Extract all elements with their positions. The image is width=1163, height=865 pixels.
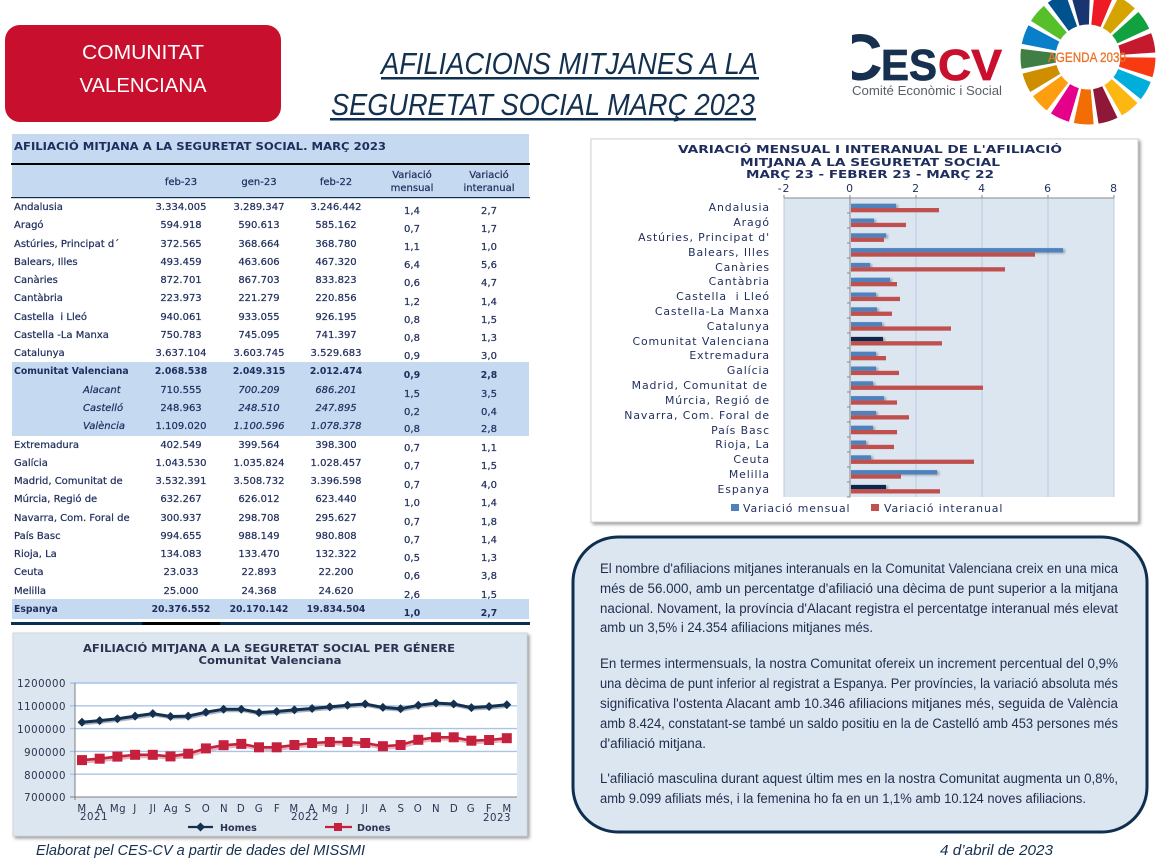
row: Madrid [14,476,497,491]
row: Astúries: 1,0 [481,242,497,253]
x axis labels: N [432,804,440,815]
row: Extremadura: 398.300 [315,440,357,451]
row: Espanya: 1,0 [404,608,421,619]
row: Comunitat Valenciana: 2.068.538 [155,366,207,377]
row: Espanya: 20.170.142 [230,604,288,615]
category labels: Astúries, Principat d' [638,231,770,244]
x axis labels: 2022 [291,812,319,823]
row: València: 1.109.020 [156,421,206,432]
row: Canàries: Canàries [14,274,58,286]
row: Canàries: 867.703 [238,275,280,286]
paragraph 3 [600,771,1118,806]
category labels: Múrcia, Regió de [665,394,770,407]
row: Navarra: 298.708 [238,513,280,524]
row: Comunitat Valenciana: 2,8 [481,370,497,381]
axis values: 6 [1044,182,1052,195]
chart title [678,143,1062,181]
row: Castella-La Manxa: 741.397 [315,330,357,341]
category labels: Andalusia [709,201,770,214]
legend: Variació mensual [743,502,850,515]
logo: CES-CV: ES [881,41,937,90]
category labels: Rioja, La [715,438,770,451]
axis values: 2 [912,182,920,195]
row: Canàries [14,274,497,289]
row: Catalunya: 3.603.745 [234,348,284,359]
row: Melilla: 1,5 [481,590,497,601]
row: Castella i Lleó: 926.195 [315,312,357,323]
x axis labels [77,804,512,824]
panel: bar chart variació mensual i interanual [591,139,1138,522]
y axis labels: 1200000 [17,679,66,690]
row: País Basc: 988.149 [238,531,280,542]
row: Cantàbria: 1,4 [481,297,497,308]
row: Castella-La Manxa: 750.783 [160,330,202,341]
row: Navarra: 1,8 [481,517,497,528]
row: Rioja: 133.470 [238,549,280,560]
x axis labels: A [96,804,104,815]
row: Extremadura [14,440,497,454]
row: Galícia: 1.043.530 [156,458,206,469]
panel: line chart per gènere [13,633,527,836]
paragraph 1: amb un 3,5% i 24.354 afiliacions mitjanes més. [600,620,873,635]
category labels: Catalunya [707,320,770,333]
axis values: 8 [1110,182,1118,195]
row: Andalusia: 2,7 [481,206,497,217]
row: Ceuta: 23.033 [164,567,198,578]
row: Melilla: 2,6 [404,590,420,601]
row: Extremadura: 1,1 [481,443,497,454]
row: Rioja: 134.083 [160,549,202,560]
axis values [778,182,1118,195]
axis values: 0 [846,182,854,195]
row: Canàries: 0,6 [404,278,420,289]
category labels: Galícia [727,364,770,377]
x axis labels: J [345,804,350,815]
x axis labels: O [414,804,422,815]
row: Comunitat Valenciana [14,366,497,381]
row: Canàries: 4,7 [481,278,497,289]
row: Catalunya [14,348,497,362]
category labels: Melilla [729,468,770,481]
row: Astúries: 368.664 [238,239,280,250]
row: València: València [83,420,125,432]
row: Aragó: 594.918 [160,220,202,231]
row: Catalunya: Catalunya [14,348,65,359]
row: Castella i Lleó: Castella i Lleó [14,311,87,323]
row: Aragó: 585.162 [315,220,357,231]
row: Castella-La Manxa [14,330,497,344]
row: Espanya: 2,7 [481,608,497,619]
row: València: 2,8 [481,424,497,435]
chart title: VARIACIÓ MENSUAL I INTERANUAL DE L'AFILIACIÓ [678,143,1062,156]
row: País Basc: 980.808 [315,531,357,542]
row: Castelló [83,402,497,418]
row: Castella i Lleó: 933.055 [238,312,280,323]
table header: feb-22 [320,177,352,188]
row: Alacant: Alacant [82,385,122,396]
category labels: País Basc [711,424,770,437]
row: Espanya: Espanya [14,604,58,615]
table header: interanual [463,183,515,194]
table title: AFILIACIÓ MITJANA A LA SEGURETAT SOCIAL. MARÇ 2023 [14,140,386,153]
paragraph 1: més de 56.000, amb un percentatge d'afiliació una dècima de punt superior a la mitjana [600,581,1119,596]
row: Catalunya: 3,0 [481,351,497,362]
x axis labels: N [220,804,228,815]
icon: Agenda 2030 wheel [1017,0,1159,128]
footer: date: 4 d’abril de 2023 [940,842,1054,859]
row: Castella-La Manxa: 0,8 [404,333,420,344]
row: Cantàbria [14,292,497,308]
category labels: Ceuta [733,453,770,466]
footer: source: Elaborat pel CES-CV a partir de dades del MISSMI [36,842,365,859]
x axis labels: Jl [149,804,156,815]
row: Rioja [14,549,497,564]
row: Madrid: 3.532.391 [156,476,206,487]
row: Astúries [14,238,497,253]
category labels [624,201,770,496]
row: Andalusia [14,202,497,217]
category labels: Espanya [718,483,770,496]
x axis labels: D [450,804,458,815]
row: Aragó: Aragó [14,219,44,231]
paragraph 1: nacional. Novament, la província d'Alacant registra el percentatge interanual més elevat [600,601,1118,616]
icon: Agenda 2030 wheel: AGENDA 2030 [1048,50,1126,65]
table: afiliació mitjana [11,134,530,625]
logo: CES-CV: Comité Econòmic i Social [852,84,1002,98]
line: Homes [82,703,508,724]
x axis labels: A [379,804,387,815]
row: Espanya: 19.834.504 [307,604,366,615]
paragraph 1: El nombre d'afiliacions mitjanes interanuals en la Comunitat Valenciana creix en una mica [600,561,1119,576]
row: Catalunya: 3.529.683 [311,348,361,359]
paragraph 3: L'afiliació masculina durant aquest últim mes en la nostra Comunitat augmenta un 0,8%, [600,771,1118,786]
row: Rioja: Rioja, La [14,549,57,560]
row: Cantàbria: 221.279 [238,293,280,304]
category labels: Balears, Illes [688,246,770,259]
row: Galícia: Galícia [14,457,48,469]
legend: Dones [357,823,391,834]
row: Galícia: 0,7 [404,461,420,472]
row: València: 1.078.378 [311,421,361,432]
row: Castella-La Manxa: Castella -La Manxa [14,330,109,341]
row: Alacant: 710.555 [160,385,202,396]
row: Catalunya: 3.637.104 [156,348,206,359]
title [330,46,759,122]
row: Múrcia [14,493,497,509]
row: Madrid: Madrid, Comunitat de [14,476,123,487]
logo: CES-CV [852,34,1002,95]
row: Rioja: 1,3 [481,553,497,564]
y axis labels: 900000 [24,748,66,759]
category labels: Canàries [715,261,770,274]
row: Castella i Lleó: 1,5 [481,315,497,326]
row: Múrcia: 1,4 [481,498,497,509]
row: Balears: 463.606 [238,257,280,268]
row: País Basc: 994.655 [160,531,202,542]
row: Madrid: 3.396.598 [311,476,361,487]
chart title: MITJANA A LA SEGURETAT SOCIAL [740,156,1000,169]
row: País Basc: País Basc [14,530,61,542]
paragraph 2: significativa l'ostenta Alacant amb 10.346 afiliacions mitjanes més, seguida de València [600,696,1119,711]
row: Galícia: 1.028.457 [311,458,361,469]
row: Navarra: 295.627 [315,513,357,524]
row: Aragó: 0,7 [404,224,420,235]
row: Navarra [14,513,497,528]
bars: variació interanual [851,208,1035,494]
row: Astúries: 368.780 [315,239,357,250]
row: Melilla: 24.620 [318,586,354,597]
table header: mensual [391,183,433,194]
title: AFILIACIONS MITJANES A LA [379,46,758,81]
y axis labels: 1100000 [17,702,66,713]
category labels: Extremadura [689,349,770,362]
row: País Basc [14,530,497,546]
paragraph 2: una dècima de punt inferior al registrat a Espanya. Per províncies, la variació absoluta més [600,676,1118,691]
row: Melilla: 25.000 [164,586,198,597]
row: Múrcia: 1,0 [404,498,420,509]
legend: Variació interanual [884,502,1003,515]
row: Cantàbria: 223.973 [160,293,202,304]
x axis labels: Ag [164,804,178,815]
row: Astúries: Astúries, Principat d´ [14,238,119,250]
paragraph 2: amb 8.424, constatant-se també un saldo positiu en la de Castelló amb 453 persones més [600,716,1118,731]
x axis labels: D [237,804,245,815]
row: Canàries: 833.823 [315,275,357,286]
row: Espanya [14,604,497,619]
row: Rioja: 132.322 [315,549,357,560]
row: Ceuta: Ceuta [14,567,44,578]
row: Balears: 467.320 [315,257,357,268]
table header [165,169,515,194]
row: Aragó: 590.613 [238,220,280,231]
row: Castelló: 248.510 [238,403,280,414]
row: Ceuta: 22.200 [318,567,354,578]
x axis labels: 2023 [483,813,511,824]
x axis labels: O [202,804,210,815]
table header: Variació [469,169,509,181]
row: Comunitat Valenciana: 2.049.315 [233,366,285,377]
row: Balears: 6,4 [404,260,420,271]
line: Dones [82,737,508,762]
chart title [83,642,455,667]
x axis labels: G [467,804,475,815]
paragraph 2: En termes intermensuals, la nostra Comunitat ofereix un increment percentual del 0,9% [600,656,1118,671]
badge: Comunitat Valenciana [5,25,281,122]
table header: feb-23 [165,177,197,188]
y axis labels: 700000 [24,793,66,804]
bars: variació mensual [851,204,1063,489]
x axis labels: M [77,804,87,815]
row: Alacant: 1,5 [404,389,420,400]
row: País Basc: 1,4 [481,535,497,546]
row: Extremadura: 402.549 [160,440,202,451]
row: Andalusia: Andalusia [14,202,63,213]
table header: Variació [392,169,432,181]
row: Comunitat Valenciana: 2.012.474 [310,366,363,377]
row: Ceuta: 22.893 [242,567,276,578]
paragraph 3: amb 9.099 afiliats més, i la femenina ho fa en un 1,1% amb 10.124 noves afiliacions. [600,791,1086,806]
legend [188,822,391,834]
row: Madrid: 4,0 [481,480,497,491]
row: Canàries: 872.701 [160,275,202,286]
y axis labels: 1000000 [17,725,66,736]
y axis labels [17,679,66,804]
row: Castella i Lleó: 940.061 [160,312,202,323]
x axis labels: A [308,804,316,815]
x axis labels: M [289,804,299,815]
plot area [784,198,1114,497]
plot area [75,683,517,797]
logo: CES-CV: CV [938,41,1003,90]
row: Extremadura: 399.564 [238,440,280,451]
x axis labels: G [255,804,263,815]
row: País Basc: 0,7 [404,535,420,546]
row: Ceuta: 3,8 [481,571,497,582]
row: Galícia: 1,5 [481,461,497,472]
row: Alacant: 686.201 [315,385,357,396]
row: Múrcia: 626.012 [238,494,280,505]
chart title: AFILIACIÓ MITJANA A LA SEGURETAT SOCIAL PER GÉNERE [83,642,455,655]
x axis labels: Mg [322,804,338,815]
x axis labels: F [486,804,492,815]
legend: Homes [220,823,257,834]
category labels: Aragó [733,216,770,229]
y axis labels: 800000 [24,771,66,782]
row: Madrid: 3.508.732 [234,476,284,487]
row: Galícia [14,457,497,472]
row: Cantàbria: 1,2 [404,297,420,308]
row: Andalusia: 3.246.442 [311,202,361,213]
x axis labels: M [502,804,512,815]
row: Castelló: 0,4 [481,407,497,418]
table header: gen-23 [241,177,277,188]
chart title: Comunitat Valenciana [198,655,342,667]
x axis labels: Jl [361,804,368,815]
row: Múrcia: 632.267 [160,494,202,505]
badge: Comunitat Valenciana: COMUNITAT [82,41,204,64]
row: Extremadura: 0,7 [404,443,420,454]
category labels: Comunitat Valenciana [632,335,770,348]
row: Navarra: 300.937 [160,513,202,524]
x axis labels: S [398,804,404,815]
row: Aragó [14,219,497,235]
row: Balears [14,257,497,271]
row: Andalusia: 3.334.005 [156,202,206,213]
row: Espanya: 20.376.552 [152,604,210,615]
row: València: 1.100.596 [234,421,284,432]
chart title: MARÇ 23 - FEBRER 23 - MARÇ 22 [746,168,994,181]
category labels: Cantàbria [709,275,770,288]
x axis labels: J [132,804,137,815]
row: Cantàbria: 220.856 [315,293,357,304]
row: Rioja: 0,5 [404,553,420,564]
row: Comunitat Valenciana: Comunitat Valenciana [14,366,129,377]
row: Astúries: 1,1 [404,242,420,253]
row: València: 0,8 [404,424,420,435]
row: Melilla: 24.368 [242,586,276,597]
x axis labels: S [185,804,191,815]
row: Múrcia: 623.440 [315,494,357,505]
row: Ceuta: 0,6 [404,571,420,582]
row: Alacant [82,385,497,400]
row: Extremadura: Extremadura [14,440,79,451]
row: Astúries: 372.565 [160,239,202,250]
panel: text commentary [573,537,1147,832]
logo: CES-CV: C [835,20,883,94]
paragraph 2: d'afiliació mitjana. [600,736,706,751]
paragraph 2 [600,656,1119,751]
legend [731,502,1003,515]
paragraph 1 [600,561,1119,635]
row: Navarra: 0,7 [404,517,420,528]
row: Andalusia: 3.289.347 [234,202,284,213]
row: Castelló: 247.895 [315,403,357,414]
category labels: Navarra, Com. Foral de [624,409,770,422]
row: Alacant: 700.209 [238,385,280,396]
row: València [83,420,497,435]
row: Comunitat Valenciana: 0,9 [404,370,420,381]
x axis labels: 2021 [80,812,108,823]
row: Madrid: 0,7 [404,480,420,491]
row: Melilla [14,586,497,601]
category labels: Castella-La Manxa [655,305,770,318]
row: Melilla: Melilla [14,586,46,597]
row: Castelló: Castelló [83,402,123,414]
row: Castella i Lleó [14,311,497,326]
row: Navarra: Navarra, Com. Foral de [14,513,130,524]
row: Andalusia: 1,4 [404,206,420,217]
row: Cantàbria: Cantàbria [14,292,63,304]
row: Ceuta [14,567,497,582]
row: Catalunya: 0,9 [404,351,420,362]
row: Castella i Lleó: 0,8 [404,315,420,326]
badge: Comunitat Valenciana: VALENCIANA [80,74,207,97]
row: Balears: Balears, Illes [14,257,78,268]
row: Castella-La Manxa: 1,3 [481,333,497,344]
x axis labels: F [274,804,280,815]
row: Castelló: 248.963 [160,403,202,414]
row: Alacant: 3,5 [481,389,497,400]
title: SEGURETAT SOCIAL MARÇ 2023 [331,87,755,122]
axis values: -2 [778,182,790,195]
row: Balears: 5,6 [481,260,497,271]
row: Múrcia: Múrcia, Regió de [14,493,97,505]
x axis labels: Mg [110,804,126,815]
row: Aragó: 1,7 [481,224,497,235]
axis values: 4 [978,182,986,195]
row: Galícia: 1.035.824 [234,458,284,469]
row: Castelló: 0,2 [404,407,420,418]
category labels: Castella i Lleó [676,290,770,303]
row: Balears: 493.459 [160,257,202,268]
row: Castella-La Manxa: 745.095 [238,330,280,341]
category labels: Madrid, Comunitat de [632,379,768,392]
